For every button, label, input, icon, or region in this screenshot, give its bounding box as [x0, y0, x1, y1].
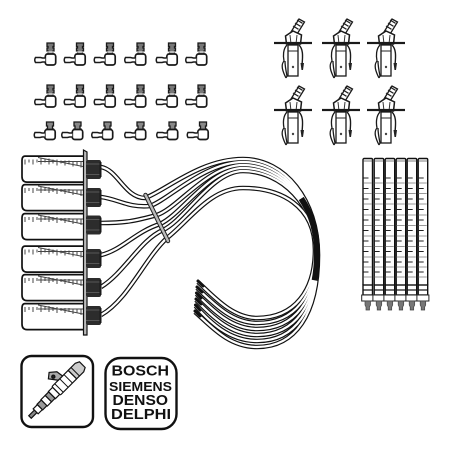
mounting plate — [84, 150, 87, 335]
brand names: BOSCH — [112, 364, 169, 380]
fittings: small row 3 — [34, 122, 208, 140]
syringe caps — [86, 160, 102, 325]
injector clips: row 1 — [274, 19, 405, 78]
fittings: large row 2 — [35, 85, 207, 107]
fittings: large row 1 — [35, 43, 207, 65]
brand names: DELPHI — [111, 407, 171, 423]
brand names: DENSO — [112, 393, 168, 409]
icon: injector badge — [17, 352, 93, 427]
badge: supported brands — [106, 358, 176, 429]
brand names: SIEMENS — [109, 379, 172, 394]
bundle clump on right bend — [243, 165, 317, 335]
syringes — [22, 156, 84, 330]
tube end tips — [195, 281, 203, 316]
brand names — [109, 364, 172, 423]
tube bundle — [101, 159, 318, 347]
tube binding strap — [146, 195, 168, 241]
graduated tubes — [362, 158, 429, 310]
injector clips: row 2 — [274, 86, 405, 145]
icon: injector — [17, 352, 87, 421]
